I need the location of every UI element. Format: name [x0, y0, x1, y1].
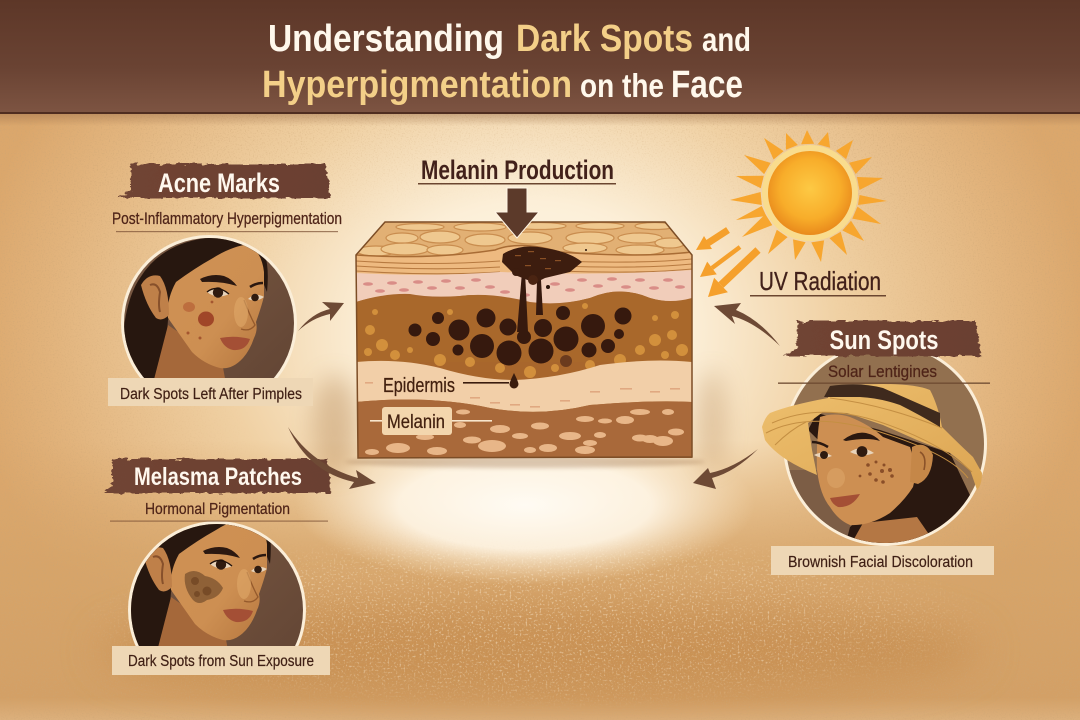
diagram: skin cross-section [345, 218, 705, 468]
label: epidermis [383, 373, 518, 397]
caption: acne marks: Dark Spots Left After Pimples [120, 386, 302, 403]
layer: skin surface [356, 222, 692, 275]
title [262, 18, 751, 106]
portrait: melasma face [128, 521, 306, 646]
icon: sun hat [762, 384, 982, 490]
arrow: acne to skin [298, 302, 344, 331]
banner: melasma patches [102, 459, 330, 493]
arrow: melasma to skin [288, 427, 376, 489]
panel: melasma patches [102, 458, 332, 675]
title: Understanding [268, 18, 504, 60]
title: Hyperpigmentation [262, 64, 572, 106]
heading: melanin production: Melanin Production [421, 155, 614, 185]
title: Face [671, 64, 743, 106]
portrait: acne marks face [121, 235, 297, 378]
arrow: sun spots to skin upper [714, 303, 780, 346]
arrow: melanin down [495, 188, 539, 238]
title: on the [580, 67, 664, 104]
panel: sun spots [762, 321, 994, 575]
title: Dark Spots [516, 18, 693, 60]
layer: lower fat cells [356, 400, 692, 460]
title: and [702, 21, 751, 58]
label: uv radiation: UV Radiation [759, 266, 881, 296]
caption: acne marks [108, 378, 313, 406]
melanin cluster [502, 246, 587, 289]
banner: sun spots [783, 321, 981, 356]
layer: pale epidermis band [356, 361, 692, 412]
header band [0, 0, 1080, 126]
banner: melasma patches: Melasma Patches [134, 463, 302, 491]
subtitle: melasma patches: Hormonal Pigmentation [145, 501, 290, 518]
caption: sun spots [771, 546, 994, 575]
banner: sun spots: Sun Spots [830, 325, 938, 355]
portrait: sun spots face [762, 354, 987, 546]
banner: acne marks [118, 164, 330, 198]
icon: sun [730, 130, 887, 262]
layer: pink dermis [356, 270, 692, 303]
layer: dark melanin dermis [356, 272, 692, 378]
caption: melasma patches: Dark Spots from Sun Exposure [128, 653, 314, 670]
label: epidermis: Epidermis [383, 375, 455, 397]
panel: acne marks [108, 164, 342, 415]
arrow: sun spots to skin lower [693, 449, 758, 489]
caption: melasma patches [112, 646, 330, 675]
label: melanin [370, 407, 492, 435]
subtitle: sun spots: Solar Lentigines [828, 363, 937, 381]
caption: sun spots: Brownish Facial Discoloration [788, 554, 973, 571]
label: melanin: Melanin [387, 412, 445, 433]
subtitle: acne marks: Post-Inflammatory Hyperpigmentation [112, 210, 342, 228]
arrows: uv rays [696, 230, 758, 297]
banner: acne marks: Acne Marks [158, 168, 280, 198]
